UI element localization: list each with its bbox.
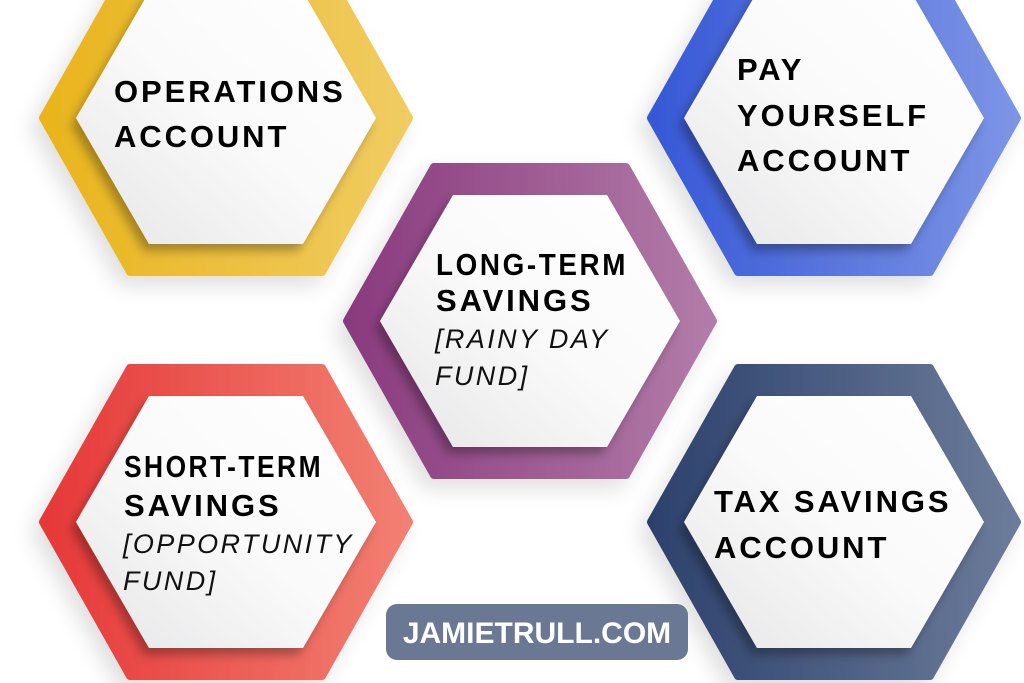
heading: tax savings account: TAX SAVINGS xyxy=(714,484,951,519)
heading: pay yourself account: YOURSELF xyxy=(737,98,929,133)
panel: operations account xyxy=(43,0,409,272)
heading: long-term savings: SAVINGS xyxy=(436,283,594,318)
button: website xyxy=(386,604,688,660)
heading: operations account: OPERATIONS xyxy=(114,74,346,109)
panel: pay yourself account xyxy=(651,0,1017,272)
heading: short-term savings: SAVINGS xyxy=(124,488,282,523)
subtitle: rainy day fund: [RAINY DAY xyxy=(435,324,610,354)
panel: long-term savings xyxy=(347,167,713,475)
subtitle: opportunity fund: [OPPORTUNITY xyxy=(123,529,354,559)
button: website: JAMIETRULL.COM xyxy=(403,617,671,650)
heading: tax savings account: ACCOUNT xyxy=(714,530,889,565)
subtitle: rainy day fund: FUND] xyxy=(435,361,530,391)
panel: tax savings account xyxy=(651,368,1017,676)
heading: operations account: ACCOUNT xyxy=(114,119,289,154)
heading: pay yourself account: PAY xyxy=(737,52,804,87)
panel: short-term savings xyxy=(43,368,409,676)
heading: short-term savings: SHORT-TERM xyxy=(124,449,323,484)
subtitle: opportunity fund: FUND] xyxy=(123,566,218,596)
heading: pay yourself account: ACCOUNT xyxy=(737,143,912,178)
heading: long-term savings: LONG-TERM xyxy=(436,247,628,282)
